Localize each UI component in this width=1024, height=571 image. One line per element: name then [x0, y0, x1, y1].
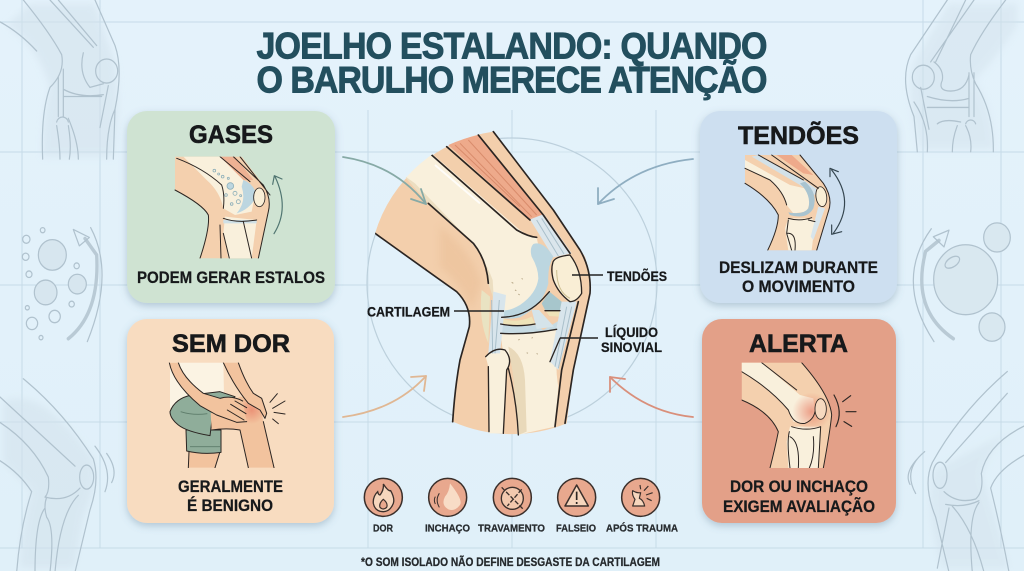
icon: inchaco	[425, 478, 470, 534]
panel: sem dor	[127, 319, 334, 523]
heading: tendoes: TENDÕES	[738, 120, 859, 150]
caption: alerta	[723, 477, 875, 516]
illustration: knee tendons	[745, 155, 845, 250]
label: liquido sinovial: LÍQUIDO	[605, 325, 658, 340]
title	[256, 25, 768, 101]
illustration: inflamed knee	[742, 363, 856, 468]
caption: tendoes: O MOVIMENTO	[742, 277, 855, 296]
icon: travamento	[478, 478, 545, 534]
heading: sem dor: SEM DOR	[172, 330, 290, 358]
caption: tendoes: DESLIZAM DURANTE	[719, 258, 878, 277]
patella	[553, 255, 582, 302]
arrow: tendoes to knee	[598, 159, 693, 204]
background knee top right	[906, 0, 1017, 152]
background bubbles left	[22, 228, 102, 342]
caption: tendoes	[719, 258, 878, 296]
tibia	[501, 329, 562, 435]
skin	[375, 132, 589, 434]
panel: tendoes	[700, 111, 897, 303]
cartilage	[499, 243, 553, 319]
caption: gases: PODEM GERAR ESTALOS	[137, 268, 325, 287]
background knee bottom left	[0, 379, 114, 571]
left arm	[169, 363, 247, 422]
ligaments	[488, 292, 506, 353]
icon: apos trauma	[606, 478, 678, 534]
icon: falseio: FALSEIO	[556, 522, 596, 534]
icon: travamento: TRAVAMENTO	[478, 522, 545, 534]
illustration: knee with gas bubbles	[175, 157, 282, 258]
caption: alerta: DOR OU INCHAÇO	[730, 477, 868, 496]
meniscus	[502, 317, 535, 325]
right arm	[223, 363, 267, 418]
black outlines	[375, 132, 590, 427]
footnote: *O SOM ISOLADO NÃO DEFINE DESGASTE DA CARTILAGEM	[361, 554, 660, 569]
bone specks	[512, 278, 538, 354]
back leg	[188, 452, 219, 468]
shorts	[186, 430, 221, 453]
label: cartilagem	[367, 304, 504, 320]
fibula	[486, 349, 510, 433]
heading: gases: GASES	[189, 121, 273, 149]
background knee bottom right	[908, 371, 1024, 571]
femur	[403, 153, 540, 312]
label: tendoes: TENDÕES	[607, 269, 667, 284]
arrow: alerta to knee	[610, 377, 693, 417]
arrow: gases to knee	[343, 157, 426, 204]
illustration: person holding knee	[169, 363, 285, 468]
caption: sem dor	[178, 477, 283, 515]
arrow: sem dor to knee	[343, 376, 426, 417]
panel: gases	[127, 111, 335, 303]
icon: apos trauma: APÓS TRAUMA	[606, 522, 678, 534]
quadriceps tendon	[530, 214, 572, 257]
title: O BARULHO MERECE ATENÇÃO	[256, 59, 767, 101]
shirt	[170, 363, 224, 408]
central knee anatomy	[375, 132, 590, 435]
caption: sem dor: É BENIGNO	[187, 496, 273, 515]
icon: dor	[364, 478, 402, 534]
icon: dor: DOR	[373, 522, 393, 534]
label: liquido sinovial	[560, 325, 662, 355]
icon: falseio	[556, 478, 596, 534]
central circle outline	[367, 138, 657, 428]
panel: alerta	[702, 319, 896, 523]
label: liquido sinovial: SINOVIAL	[601, 340, 662, 355]
background bubbles right	[913, 223, 1010, 342]
caption: sem dor: GERALMENTE	[178, 477, 283, 496]
label: cartilagem: CARTILAGEM	[367, 304, 450, 320]
title: JOELHO ESTALANDO: QUANDO	[256, 25, 767, 67]
heading: alerta: ALERTA	[749, 330, 848, 358]
caption: alerta: EXIGEM AVALIAÇÃO	[723, 496, 875, 516]
label: tendoes	[572, 269, 667, 284]
icon: inchaco: INCHAÇO	[425, 522, 470, 534]
thigh and shin	[211, 397, 274, 468]
background knee top left	[0, 0, 119, 159]
muscle	[448, 135, 543, 220]
